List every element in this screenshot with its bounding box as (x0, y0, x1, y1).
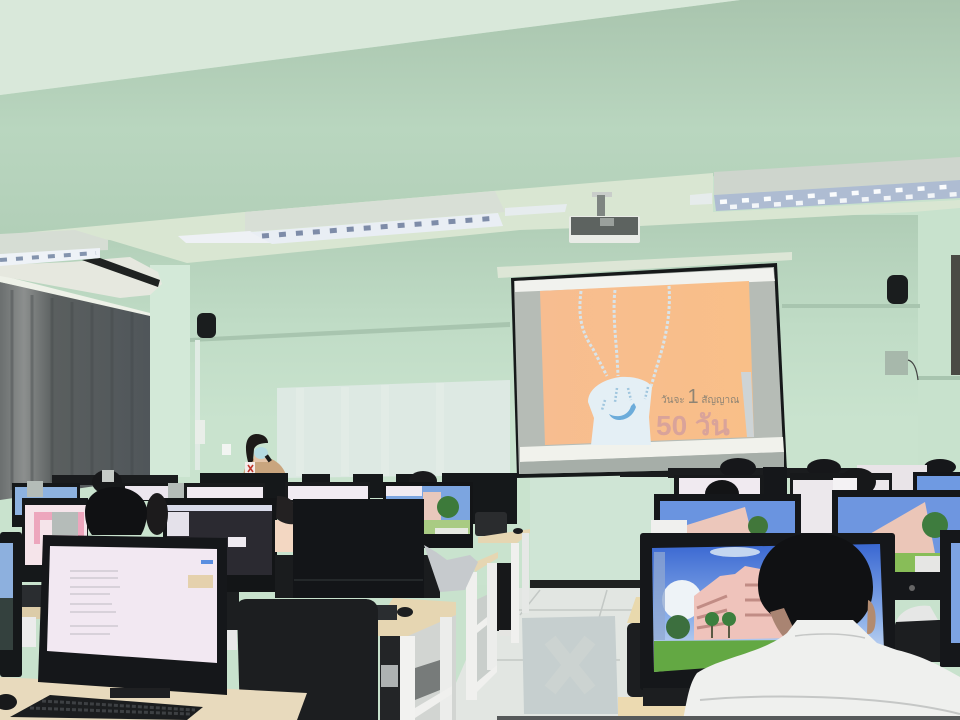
screen text: วันจะ 1 สัญญาณ (661, 386, 739, 408)
ceiling lights (0, 157, 960, 266)
desk A (375, 598, 456, 720)
front left monitor (0, 532, 307, 720)
middle monitors (275, 482, 507, 598)
right second row monitors (620, 458, 960, 600)
screen big number: 50 วัน (656, 410, 730, 441)
right student desk items (618, 597, 947, 718)
empty chair back (237, 599, 378, 720)
front right student (683, 533, 960, 720)
second row left monitors (22, 493, 295, 592)
rightmost partial monitor (940, 530, 960, 667)
back row monitors (12, 470, 517, 527)
projection screen (497, 252, 792, 478)
desk C with student legs (478, 528, 530, 643)
front right monitor with campus wallpaper (640, 533, 895, 706)
bottom foreground edge (497, 716, 960, 720)
dark door edge (951, 255, 960, 375)
air conditioner (0, 257, 162, 316)
screen slide artwork (580, 286, 754, 445)
student sleeve in middle (424, 545, 478, 592)
paper divider on desk (522, 616, 618, 714)
student head left (85, 487, 147, 535)
projector (569, 192, 640, 243)
curtain (0, 282, 150, 500)
floor and skirting (440, 580, 640, 720)
desk B (466, 552, 498, 700)
speakers (197, 275, 908, 338)
teacher (243, 434, 286, 475)
whiteboard (277, 380, 510, 478)
wall socket and cable (195, 351, 918, 455)
